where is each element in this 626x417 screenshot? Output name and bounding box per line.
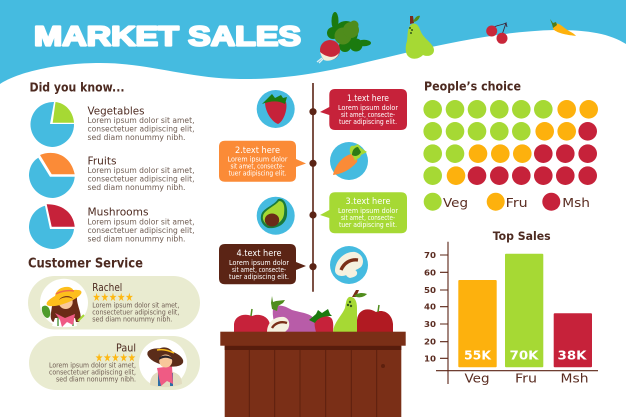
- callout 4: 4.text here: [236, 249, 282, 259]
- callout 4: [219, 244, 306, 284]
- heading: customer service: Customer Service: [28, 257, 143, 272]
- text: mushrooms: Mushrooms: [88, 206, 149, 219]
- callout 2: tuer adipiscing elit.: [228, 170, 286, 178]
- pie: vegetables: [30, 102, 74, 147]
- callout 1: 1.text here: [347, 94, 389, 104]
- wooden crate: [220, 332, 406, 417]
- text: fruits: [88, 154, 194, 192]
- text: Rachel review: ★★★★★: [92, 290, 134, 304]
- text: fruits: consectetuer adipiscing elit,: [88, 174, 194, 183]
- axes: 60: [424, 268, 436, 277]
- pie: fruits: [29, 153, 75, 198]
- text: fruits: sed diam nonummy nibh.: [88, 183, 186, 192]
- callout 4: sit amet, consecte-: [232, 266, 287, 274]
- avatar: Rachel: [40, 279, 88, 327]
- axes: 50: [424, 286, 436, 295]
- heading: people's choice: People’s choice: [424, 80, 521, 94]
- text: vegetables: [88, 104, 194, 142]
- text: vegetables: sed diam nonummy nibh.: [88, 133, 186, 142]
- heading: top sales: Top Sales: [493, 229, 551, 243]
- axes: 40: [424, 303, 436, 312]
- eggplant: [271, 296, 318, 332]
- bar: veg: [458, 280, 497, 386]
- callout 2: [219, 141, 306, 182]
- text: mushrooms: Lorem ipsum dolor sit amet,: [88, 218, 194, 226]
- text: Rachel review: [92, 281, 179, 324]
- callout 3: [320, 192, 407, 233]
- text: Paul review: Paul: [116, 342, 136, 355]
- pie: mushrooms: [29, 204, 75, 249]
- avatar: Paul: [139, 339, 187, 387]
- icon: strawberry: [257, 90, 295, 128]
- dot matrix chart: people's choice: [423, 100, 598, 185]
- panel: did you know pie charts: [29, 102, 194, 249]
- icon: avocado: [257, 197, 295, 235]
- bar: fru: [505, 254, 543, 386]
- axes: 30: [424, 320, 436, 329]
- apple right: [357, 305, 393, 332]
- legend: Fru: [506, 195, 528, 210]
- callout 2: sit amet, consecte-: [230, 162, 285, 170]
- icon: chili pepper: [550, 19, 576, 36]
- callout 1: Lorem ipsum dolor: [338, 104, 398, 112]
- text: fruits: Fruits: [88, 154, 117, 167]
- callout 2: Lorem ipsum dolor: [228, 156, 288, 164]
- text: vegetables: Lorem ipsum dolor sit amet,: [88, 116, 194, 125]
- bar: msh: Msh: [560, 371, 588, 386]
- icon: pear: [406, 16, 434, 59]
- legend: [424, 193, 590, 211]
- title: MARKET SALES: [34, 20, 301, 52]
- callout 4: Lorem ipsum dolor: [229, 259, 289, 267]
- icon: carrot: [330, 142, 368, 180]
- bar: fru: 70K: [510, 349, 539, 363]
- legend: Msh: [562, 195, 590, 210]
- text: mushrooms: consectetuer adipiscing elit,: [88, 226, 194, 235]
- text: Paul review: consectetuer adipiscing elit,: [49, 368, 136, 376]
- heading: did you know: Did you know...: [30, 80, 124, 95]
- callout 3: 3.text here: [346, 197, 391, 207]
- strawberry: [309, 309, 333, 332]
- mushroom: [267, 317, 289, 332]
- bar: msh: 38K: [558, 349, 587, 363]
- panel: customer review Paul: [29, 336, 200, 390]
- callout 1: sit amet, consecte-: [341, 111, 396, 119]
- text: vegetables: consectetuer adipiscing elit,: [88, 124, 194, 134]
- text: vegetables: Vegetables: [88, 104, 145, 117]
- callout 2: 2.text here: [235, 146, 280, 156]
- bar: veg: 55K: [464, 349, 492, 363]
- text: Paul review: Lorem ipsum dolor sit amet,: [49, 362, 136, 370]
- callout 1: tuer adipiscing elit.: [339, 118, 397, 126]
- panel: customer review Rachel: [28, 276, 200, 330]
- callout 3: sit amet, consecte-: [341, 214, 396, 222]
- bar: veg: Veg: [464, 371, 490, 386]
- text: Rachel review: Lorem ipsum dolor sit amet,: [92, 302, 179, 310]
- timeline: [309, 83, 317, 292]
- icon: cherries: [486, 23, 508, 44]
- text: Paul review: ★★★★★: [95, 350, 136, 364]
- text: Rachel review: sed diam nonummy nibh.: [92, 316, 172, 324]
- apple left: [234, 309, 270, 332]
- text: Rachel review: Rachel: [92, 281, 122, 294]
- callout 1: [320, 89, 407, 130]
- bar chart: top sales: [424, 242, 598, 386]
- callout 4: tuer adipiscing elit.: [229, 273, 289, 281]
- icon: lettuce and radish: [317, 12, 371, 63]
- text: Paul review: [49, 342, 136, 384]
- text: mushrooms: sed diam nonummy nibh.: [88, 234, 186, 243]
- bar: fru: Fru: [515, 371, 537, 386]
- bar: msh: [554, 313, 592, 386]
- callout 3: tuer adipiscing elit.: [339, 221, 397, 229]
- text: Paul review: sed diam nonummy nibh.: [56, 376, 136, 384]
- legend: Veg: [443, 195, 468, 210]
- fruit basket contents: [234, 290, 393, 332]
- icon: mushroom: [330, 246, 368, 284]
- text: fruits: Lorem ipsum dolor sit amet,: [88, 166, 194, 175]
- axes: [424, 242, 598, 384]
- axes: 70: [424, 251, 436, 260]
- axes: 20: [424, 338, 436, 347]
- text: Rachel review: consectetuer adipiscing elit,: [92, 308, 179, 316]
- pear: [333, 290, 367, 332]
- axes: 10: [424, 354, 436, 363]
- text: mushrooms: [88, 206, 194, 243]
- callout 3: Lorem ipsum dolor: [338, 207, 398, 215]
